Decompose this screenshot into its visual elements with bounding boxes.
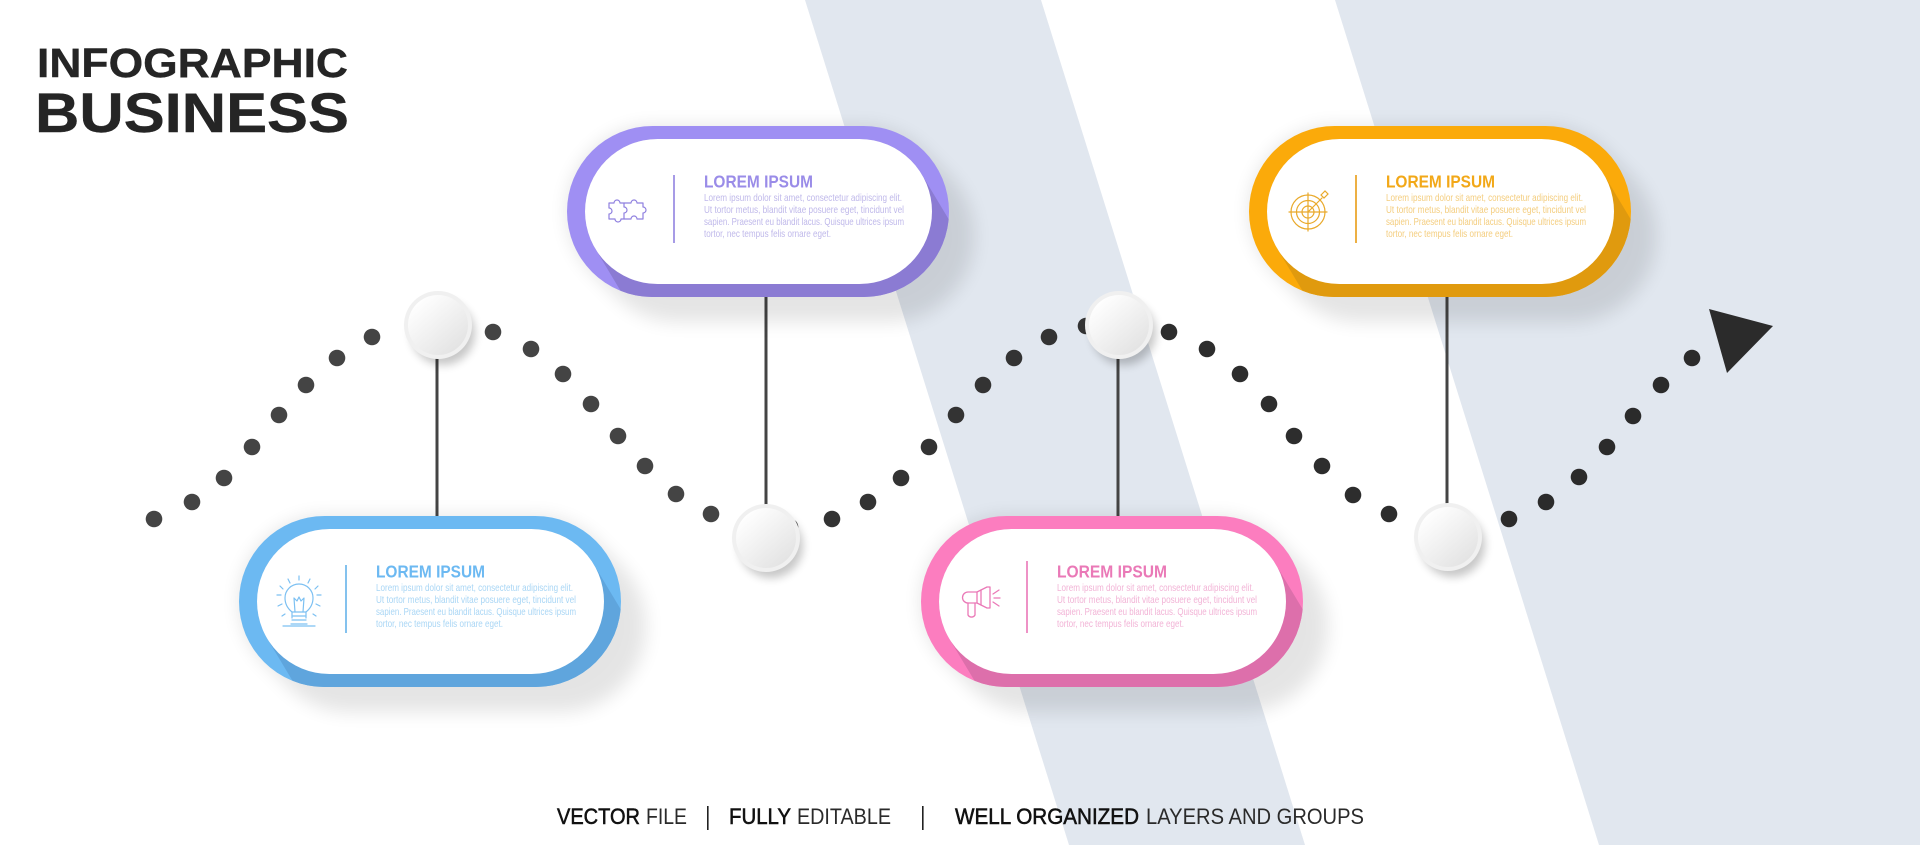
text block: blue card: sapien. Praesent eu blandit lacus. Quisque ultrices ipsum [376, 606, 576, 618]
footer caption: FILE [646, 804, 687, 829]
text block: orange card: Lorem ipsum dolor sit amet, consectetur adipiscing elit. [1386, 192, 1583, 204]
text block: pink card: tortor, nec tempus felis ornare eget. [1057, 618, 1184, 630]
heading: pink card: LOREM IPSUM [1057, 562, 1167, 582]
text block: orange card: Ut tortor metus, blandit vitae posuere eget, tincidunt vel [1386, 204, 1586, 216]
panel: pink card [921, 516, 1303, 687]
text block: orange card [1386, 192, 1586, 240]
title [35, 40, 349, 144]
text block: purple card [704, 192, 904, 240]
panel: blue card [239, 516, 621, 687]
heading: orange card: LOREM IPSUM [1386, 172, 1495, 192]
footer caption: LAYERS AND GROUPS [1146, 804, 1364, 829]
text block: blue card: Ut tortor metus, blandit vitae posuere eget, tincidunt vel [376, 594, 576, 606]
text block: pink card: Ut tortor metus, blandit vitae posuere eget, tincidunt vel [1057, 594, 1257, 606]
text block: pink card [1057, 582, 1257, 630]
text block: purple card: tortor, nec tempus felis ornare eget. [704, 228, 831, 240]
connector lines [437, 295, 1447, 518]
text block: purple card: Lorem ipsum dolor sit amet, consectetur adipiscing elit. [704, 192, 902, 204]
icon: puzzle [609, 200, 646, 222]
text block: blue card [376, 582, 576, 630]
knob 2 [732, 504, 803, 578]
footer caption: EDITABLE [797, 804, 891, 829]
footer caption: FULLY [729, 804, 791, 829]
text block: blue card: Lorem ipsum dolor sit amet, consectetur adipiscing elit. [376, 582, 573, 594]
title: INFOGRAPHIC [37, 40, 348, 86]
dotted path first descent [485, 324, 798, 535]
text block: purple card: sapien. Praesent eu blandit lacus. Quisque ultrices ipsum [704, 216, 904, 228]
panel: orange card [1249, 126, 1631, 297]
heading: purple card: LOREM IPSUM [704, 172, 813, 192]
knob 3 [1085, 291, 1156, 365]
text block: orange card: sapien. Praesent eu blandit lacus. Quisque ultrices ipsum [1386, 216, 1586, 228]
text block: pink card: Lorem ipsum dolor sit amet, consectetur adipiscing elit. [1057, 582, 1254, 594]
dotted path left rising [146, 329, 380, 527]
text block: pink card: sapien. Praesent eu blandit lacus. Quisque ultrices ipsum [1057, 606, 1257, 618]
footer caption: WELL ORGANIZED [955, 804, 1139, 829]
diagonal background bands [805, 0, 1920, 845]
knob 1 [404, 291, 475, 365]
title: BUSINESS [35, 81, 349, 144]
text block: purple card: Ut tortor metus, blandit vitae posuere eget, tincidunt vel [704, 204, 904, 216]
arrow head [1709, 309, 1773, 373]
panel: purple card [567, 126, 949, 297]
text block: blue card: tortor, nec tempus felis ornare eget. [376, 618, 503, 630]
knob 4 [1414, 503, 1485, 577]
dotted path second descent [1161, 324, 1397, 522]
icon: light bulb [277, 576, 321, 626]
footer caption [557, 804, 1364, 830]
footer caption: VECTOR [557, 804, 640, 829]
dotted path second rise [824, 318, 1094, 527]
icon: target [1289, 191, 1328, 231]
text block: orange card: tortor, nec tempus felis ornare eget. [1386, 228, 1513, 240]
dotted path final rise [1501, 350, 1700, 527]
icon: megaphone [962, 587, 1000, 617]
heading: blue card: LOREM IPSUM [376, 562, 485, 582]
